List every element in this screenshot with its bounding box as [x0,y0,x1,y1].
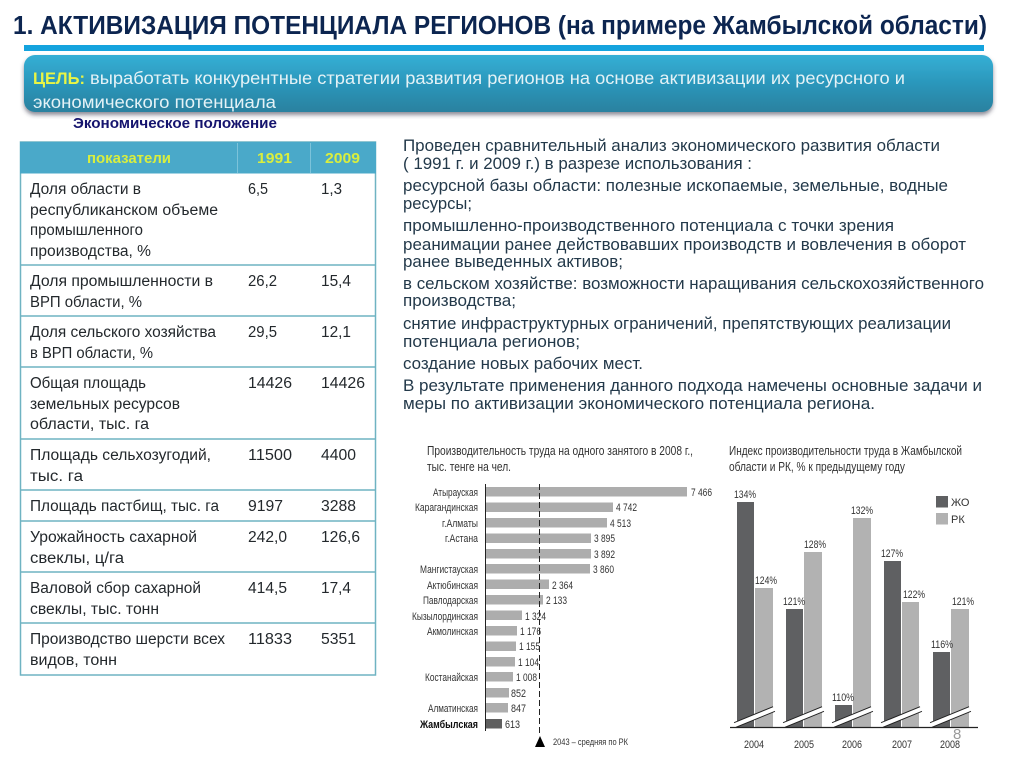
table rows: 5351 [321,631,356,648]
bar values: 1 008 [516,672,537,684]
bar values: 1 176 [520,626,541,638]
table heading: Экономическое положение [73,115,277,132]
bar values: 3 895 [594,533,615,545]
table rows: свеклы, тыс. тонн [30,601,159,618]
region labels: Акмолинская [427,626,478,638]
bar values: 4 742 [616,502,637,514]
bar chart: labour productivity by region [412,443,712,747]
text block: analysis: меры по активизации экономического потенциала региона. [403,395,875,413]
bar values: 1 324 [525,611,546,623]
table rows: видов, тонн [30,652,117,669]
table rows: 11500 [248,447,292,464]
table header: 2009 [325,150,360,167]
region labels: Мангистауская [420,564,478,576]
goal text [33,68,905,112]
table rows: 29,5 [248,324,277,341]
text block: analysis: промышленно-производственного потенциала с точки зрения [403,217,894,235]
value labels: 121% [952,596,974,608]
text block: analysis: ( 1991 г. и 2009 г.) в разрезе использования : [403,155,752,173]
region labels: г.Алматы [442,518,478,530]
legend: ЖО [951,497,970,509]
legend: РК [951,514,965,526]
region labels: Карагандинская [415,502,478,514]
table rows: ВРП области, % [30,294,142,311]
table rows: свеклы, ц/га [30,550,124,567]
value labels: 110% [832,692,854,704]
table rows: Доля промышленности в [30,273,213,290]
goal text: экономического потенциала [33,92,276,112]
chart title: области и РК, % к предыдущему году [729,459,905,474]
bar chart: productivity index [729,443,978,751]
year labels: 2008 [940,739,960,751]
table rows [30,181,365,669]
region labels: г.Астана [445,533,479,545]
text block: analysis: в сельском хозяйстве: возможности наращивания сельскохозяйственного [403,275,984,293]
text block: analysis: ранее выведенных активов; [403,253,623,271]
table rows: Урожайность сахарной [30,529,197,546]
bar values: 1 155 [519,641,540,653]
table rows: земельных ресурсов [30,396,180,413]
page number: 8 [953,726,961,743]
table rows: Площадь пастбищ, тыс. га [30,498,219,515]
text block: analysis: реанимации ранее действовавших производств и вовлечения в оборот [403,236,967,254]
table rows: производства, % [30,243,151,260]
bar values: 847 [511,703,526,715]
text block: analysis: ресурсы; [403,195,472,213]
value labels: 116% [931,639,953,651]
table rows: области, тыс. га [30,416,149,433]
value labels: 124% [755,575,777,587]
table rows: 414,5 [248,580,287,597]
bar values: 4 513 [610,518,631,530]
text block: analysis: производства; [403,292,516,310]
table header: показатели [87,150,171,167]
value labels: 132% [851,505,873,517]
table rows: 242,0 [248,529,287,546]
goal text: выработать конкурентные стратегии развития регионов на основе активизации их ресурсного и [90,68,905,88]
panel: goal banner [24,55,993,112]
region labels: Атырауская [433,487,478,499]
table rows: 11833 [248,631,292,648]
text block: analysis: создание новых рабочих мест. [403,355,643,373]
table rows: 26,2 [248,273,277,290]
region labels: Жамбылская [419,719,478,731]
text block: analysis: В результате применения данного подхода намечены основные задачи и [403,377,982,395]
table rows: 15,4 [321,273,351,290]
value labels: 127% [881,548,903,560]
text block: analysis [403,137,984,413]
bar values: 2 364 [552,580,573,592]
table header [20,142,376,174]
table rows: Доля области в [30,181,141,198]
value labels: 122% [903,589,925,601]
chart title: Производительность труда на одного занятого в 2008 г., [427,443,693,458]
average marker [535,736,629,747]
bar values: 852 [511,688,526,700]
chart title [729,443,962,474]
region labels: Кызылординская [412,611,478,623]
bar values: 3 860 [593,564,614,576]
table rows: Площадь сельхозугодий, [30,447,211,464]
value labels: 128% [804,539,826,551]
year labels: 2004 [744,739,764,751]
table rows: 12,1 [321,324,351,341]
title: 1. АКТИВИЗАЦИЯ ПОТЕНЦИАЛА РЕГИОНОВ (на примере Жамбылской области) [13,12,987,40]
legend [936,496,970,526]
table rows: Валовой сбор сахарной [30,580,201,597]
bar values: 3 892 [594,549,615,561]
table rows: 6,5 [248,181,268,198]
chart title: тыс. тенге на чел. [427,459,511,474]
table rows: 14426 [321,375,365,392]
value labels [734,489,974,704]
goal label: ЦЕЛЬ: [33,69,85,88]
table rows: Доля сельского хозяйства [30,324,216,341]
table rows: 17,4 [321,580,351,597]
bar values: 613 [505,719,520,731]
region labels [412,487,479,731]
table rows: промышленного [30,222,143,239]
table: economic position [20,142,376,675]
value labels: 134% [734,489,756,501]
text block: analysis: снятие инфраструктурных ограничений, препятствующих реализации [403,315,951,333]
chart title [427,443,693,474]
axis breaks [734,709,971,725]
average marker: 2043 – средняя по РК [553,737,629,747]
table rows: 1,3 [321,181,342,198]
chart title: Индекс производительности труда в Жамбылской [729,443,962,458]
table rows: 3288 [321,498,356,515]
text block: analysis: ресурсной базы области: полезные ископаемые, земельные, водные [403,177,948,195]
table rows: тыс. га [30,468,83,485]
region labels: Костанайская [425,672,478,684]
year labels [744,739,960,751]
bar values: 1 104 [518,657,539,669]
year labels: 2007 [892,739,912,751]
region labels: Павлодарская [423,595,478,607]
year labels: 2006 [842,739,862,751]
table rows: республиканском объеме [30,202,218,219]
text block: analysis: Проведен сравнительный анализ экономического развития области [403,137,940,155]
table rows: 14426 [248,375,292,392]
region labels: Алматинская [428,703,478,715]
bar values: 7 466 [691,487,712,499]
bar values [505,487,712,731]
value labels: 121% [783,596,805,608]
table rows: 126,6 [321,529,360,546]
region labels: Актюбинская [427,580,478,592]
bar values: 2 133 [546,595,567,607]
table rows: 9197 [248,498,283,515]
table rows: в ВРП области, % [30,345,153,362]
table rows: Общая площадь [30,375,146,392]
table rows: Производство шерсти всех [30,631,225,648]
table rows: 4400 [321,447,356,464]
year labels: 2005 [794,739,814,751]
text block: analysis: потенциала регионов; [403,333,580,351]
table header: 1991 [257,150,292,167]
